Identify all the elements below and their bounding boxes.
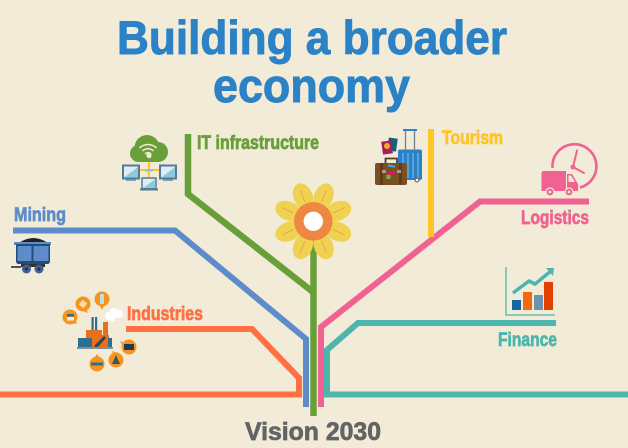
icon: delivery truck and clock	[542, 144, 596, 196]
label: IT infrastructure: IT infrastructure	[197, 133, 319, 154]
main stem	[310, 240, 317, 416]
branch: tourism line	[428, 129, 434, 237]
title: economy	[213, 59, 410, 112]
branch: logistics line	[321, 202, 589, 407]
title: Building a broader	[117, 11, 507, 64]
label: Industries: Industries	[127, 304, 203, 325]
label: Mining: Mining	[14, 205, 66, 226]
branch: IT infrastructure line	[188, 134, 313, 292]
branch: finance line	[327, 323, 628, 394]
icon: luggage	[375, 129, 422, 185]
icon: mining cart	[11, 238, 51, 274]
icon: flower	[272, 180, 354, 262]
icon: industries factory	[62, 292, 136, 372]
label: Finance: Finance	[498, 330, 557, 351]
branch: industries line	[0, 329, 299, 394]
branch: mining line	[13, 230, 306, 407]
label: Logistics: Logistics	[521, 208, 589, 229]
label: Vision 2030: Vision 2030	[245, 418, 381, 446]
title	[117, 11, 507, 112]
label: Tourism: Tourism	[442, 128, 503, 149]
icon: cloud network	[123, 135, 176, 190]
icon: finance chart	[506, 267, 555, 315]
